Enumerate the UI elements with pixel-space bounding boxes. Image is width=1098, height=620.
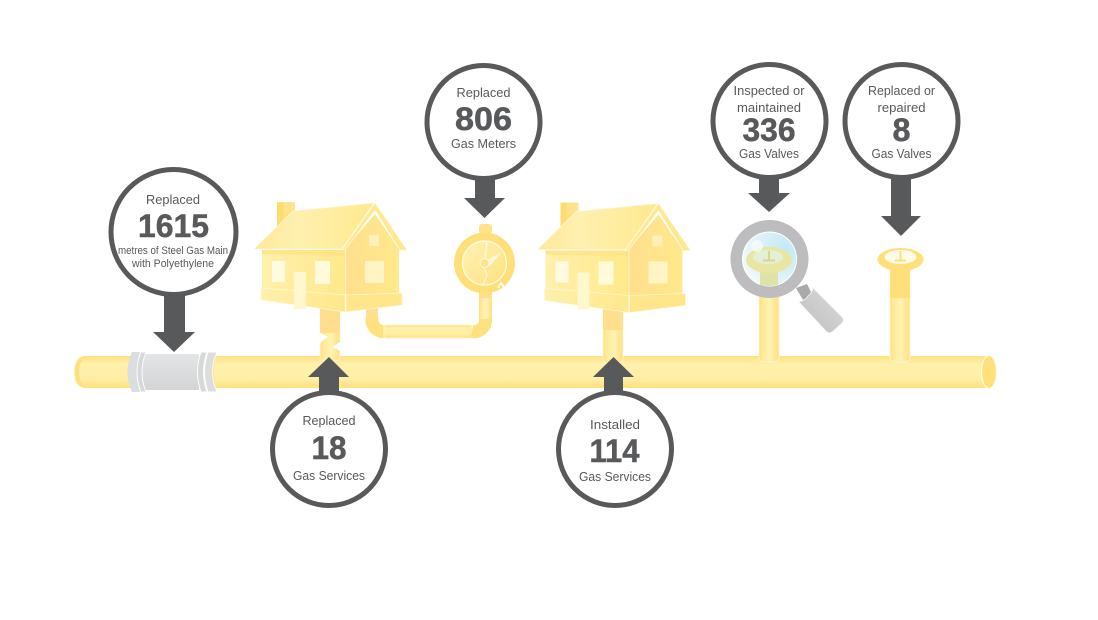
icon: gas meter bbox=[454, 224, 515, 294]
callout: 806 gas meters: 806 bbox=[455, 101, 512, 137]
callout: 1615 metres of steel gas main: metres of Steel Gas Main bbox=[118, 245, 228, 257]
valve pipe under magnifier bbox=[759, 292, 779, 362]
callout: 806 gas meters bbox=[427, 66, 540, 218]
callout: 114 gas services: Installed bbox=[590, 417, 640, 432]
callout: 8 gas valves bbox=[845, 64, 958, 236]
main gas pipe bbox=[74, 356, 996, 388]
callout: 336 gas valves bbox=[713, 64, 826, 212]
icon: house left bbox=[254, 202, 407, 312]
service pipe: installed connection bbox=[603, 308, 623, 363]
callout: 114 gas services: 114 bbox=[590, 433, 640, 469]
callout: 8 gas valves: Gas Valves bbox=[872, 146, 932, 161]
callout: 18 gas services: 18 bbox=[312, 430, 346, 466]
callout: 336 gas valves: Gas Valves bbox=[739, 146, 799, 161]
callout: 1615 metres of steel gas main: Replaced bbox=[146, 192, 200, 207]
callout: 806 gas meters: Gas Meters bbox=[451, 136, 516, 151]
callout: 1615 metres of steel gas main: with Polyethylene bbox=[131, 258, 214, 270]
callout: 1615 metres of steel gas main: 1615 bbox=[138, 208, 209, 244]
icon: magnifying glass over valve bbox=[736, 226, 843, 333]
callout: 18 gas services: Replaced bbox=[302, 413, 356, 428]
callout: 806 gas meters: Replaced bbox=[456, 85, 510, 100]
icon: surface valve and riser bbox=[878, 248, 924, 362]
callout: 114 gas services: Gas Services bbox=[579, 469, 651, 484]
callout: 8 gas valves: repaired bbox=[878, 100, 926, 115]
callout: 1615 metres of steel gas main bbox=[111, 170, 236, 352]
callout: 8 gas valves: 8 bbox=[892, 112, 910, 148]
callout: 336 gas valves: Inspected or bbox=[734, 83, 805, 98]
callout: 336 gas valves: maintained bbox=[737, 100, 801, 115]
service pipe: replaced connection bbox=[319, 308, 342, 361]
pipe coupling: polyethylene section bbox=[128, 352, 217, 392]
callout: 18 gas services bbox=[272, 357, 386, 506]
icon: house right bbox=[538, 202, 690, 312]
connecting pipe to gas meter bbox=[366, 292, 492, 338]
callout: 336 gas valves: 336 bbox=[742, 112, 796, 148]
callout: 18 gas services: Gas Services bbox=[293, 468, 365, 483]
callout: 8 gas valves: Replaced or bbox=[868, 83, 936, 98]
callout: 114 gas services bbox=[558, 357, 672, 506]
